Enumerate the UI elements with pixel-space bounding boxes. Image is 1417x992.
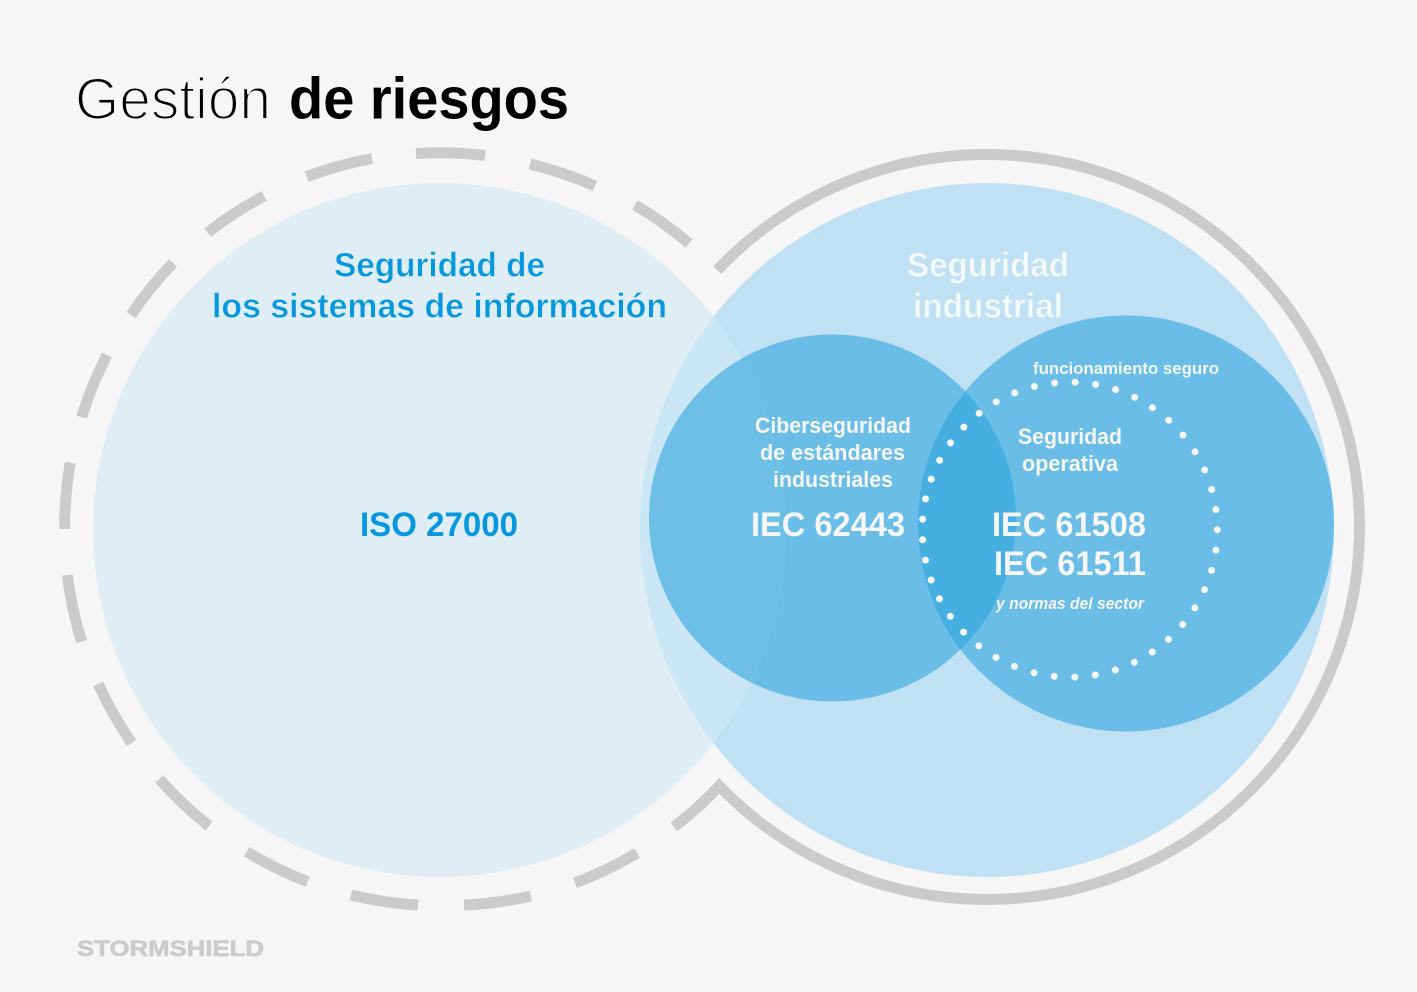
title: Gestión (75, 67, 271, 132)
label: operational safety: operativa (1022, 451, 1119, 476)
circle: industrial standards cybersecurity (649, 334, 1016, 702)
label: industrial standards cybersecurity: de estándares (760, 440, 905, 465)
circle: information systems security (93, 183, 787, 877)
heading: industrial security: Seguridad (907, 246, 1069, 284)
heading: industrial security (907, 246, 1069, 326)
label: sector standards: y normas del sector (995, 594, 1145, 613)
circle: safe operation (918, 316, 1334, 732)
label: operational safety (1018, 424, 1122, 476)
circle: industrial security (640, 183, 1334, 877)
heading: information systems security: Seguridad de (334, 246, 545, 284)
heading: information systems security: los sistemas de información (212, 288, 667, 326)
logo: Stormshield: STORMSHIELD (77, 936, 264, 961)
label: safe operation: funcionamiento seguro (1033, 359, 1219, 378)
label: operational safety: Seguridad (1018, 424, 1122, 449)
dotted circle: operational safety (922, 382, 1217, 677)
heading: information systems security (212, 246, 667, 326)
label: IEC 61508 and IEC 61511: IEC 61511 (994, 545, 1146, 583)
dashed ring: information systems scope (65, 153, 689, 905)
label: IEC 62443: IEC 62443 (751, 506, 905, 544)
title: de riesgos (289, 66, 569, 132)
label: IEC 61508 and IEC 61511 (992, 506, 1146, 583)
heading: industrial security: industrial (913, 288, 1063, 326)
label: industrial standards cybersecurity: Ciberseguridad (755, 413, 911, 438)
label: IEC 61508 and IEC 61511: IEC 61508 (992, 506, 1146, 544)
label: ISO 27000: ISO 27000 (360, 506, 518, 544)
label: industrial standards cybersecurity: industriales (773, 467, 893, 492)
solid ring: industrial security scope (674, 154, 1359, 899)
label: industrial standards cybersecurity (755, 413, 911, 492)
title (75, 66, 569, 132)
